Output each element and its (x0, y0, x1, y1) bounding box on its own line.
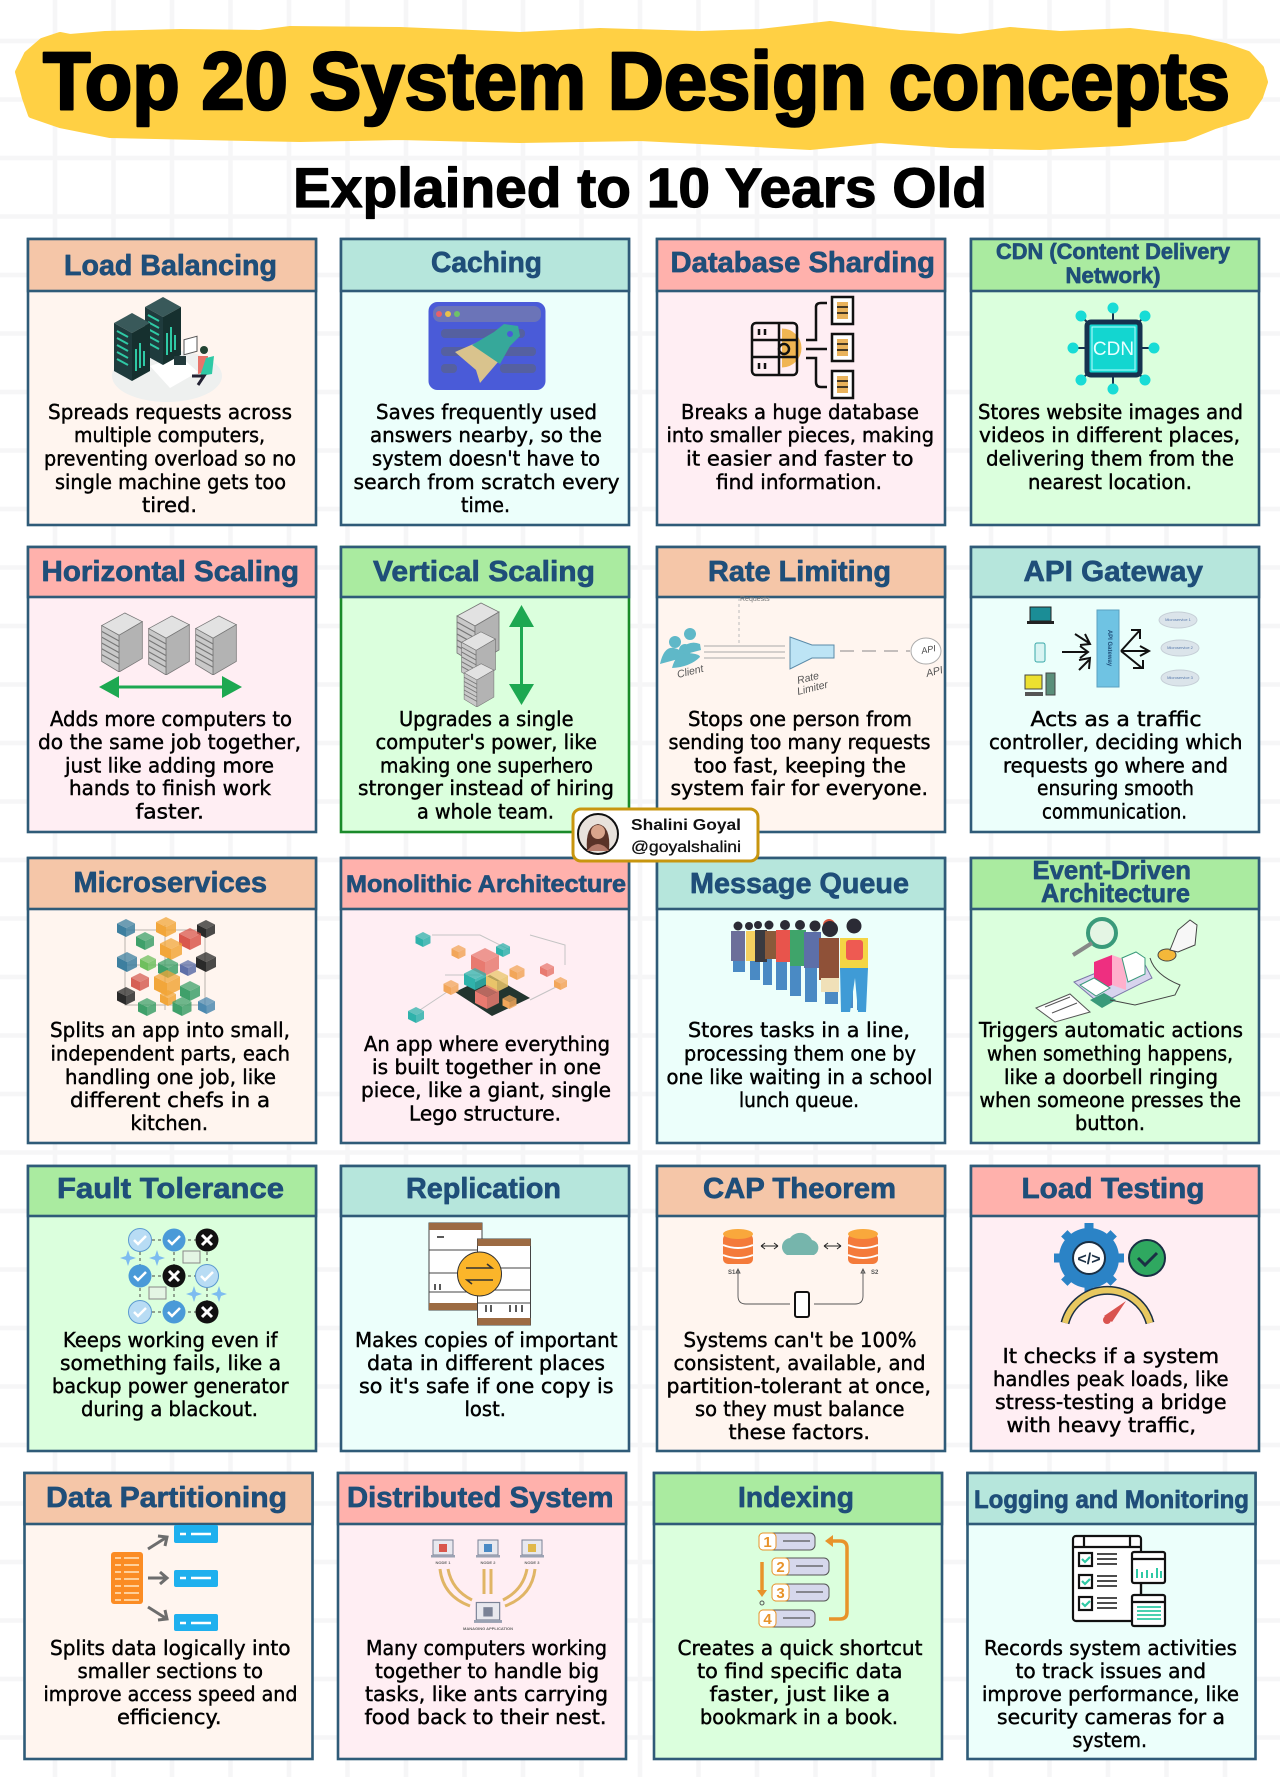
icon: button triggering data blocks (1036, 919, 1197, 1022)
description: into smaller pieces, making (666, 423, 934, 447)
description: improve performance, like (982, 1682, 1239, 1706)
description: Saves frequently used (376, 400, 597, 424)
description (668, 707, 930, 800)
description: one like waiting in a school (666, 1065, 932, 1089)
description: Splits an app into small, (50, 1018, 290, 1042)
description: tasks, like ants carrying (365, 1682, 608, 1706)
panel: Load Testing (971, 1166, 1259, 1451)
heading: Event-Driven Architecture: Architecture (1041, 878, 1190, 908)
description (666, 1018, 932, 1112)
description (666, 400, 934, 494)
icon: stacked servers and vertical arrow (457, 603, 534, 707)
icon: rate limiter diagram: API (924, 664, 944, 680)
icon: API gateway diagram: Microservice 2 (1167, 645, 1194, 650)
description: Lego structure. (409, 1102, 561, 1126)
description: time. (461, 493, 510, 517)
description: with heavy traffic, (1006, 1413, 1196, 1437)
description (361, 1032, 611, 1126)
description (678, 1636, 922, 1729)
description (982, 1636, 1239, 1752)
title banner: Top 20 System Design concepts (43, 36, 1230, 127)
description: find information. (716, 470, 882, 494)
description: Stops one person from (688, 707, 912, 731)
heading: Distributed System: Distributed System (347, 1482, 614, 1514)
description: a whole team. (417, 800, 554, 824)
icon: rate limiter diagram: Requests (740, 596, 770, 603)
heading: Replication: Replication (406, 1173, 561, 1205)
icon: nodes connected to manager: MANAGING APPLICATION (463, 1626, 513, 1631)
description: do the same job together, (38, 730, 301, 754)
description: is built together in one (372, 1055, 601, 1079)
description: stronger instead of hiring (358, 776, 614, 800)
panel: Load Balancing (28, 239, 316, 525)
description: lunch queue. (739, 1088, 859, 1112)
description (666, 1328, 931, 1444)
description: requests go where and (1003, 754, 1228, 778)
heading: Rate Limiting: Rate Limiting (708, 556, 891, 588)
panel: Rate Limiting (657, 547, 945, 832)
heading: Message Queue: Message Queue (690, 868, 909, 900)
description: answers nearby, so the (370, 423, 602, 447)
description: Records system activities (984, 1636, 1237, 1660)
description: faster. (136, 800, 204, 824)
icon: numbered index list with arrows (757, 1533, 847, 1628)
panel: Event-Driven Architecture (971, 855, 1259, 1143)
heading: Data Partitioning: Data Partitioning (46, 1482, 287, 1514)
description: backup power generator (52, 1374, 289, 1398)
heading: Horizontal Scaling: Horizontal Scaling (42, 556, 299, 588)
description: when someone presses the (980, 1088, 1241, 1112)
subtitle: Explained to 10 Years Old (293, 156, 987, 219)
description (978, 1018, 1243, 1135)
heading: API Gateway (971, 547, 1259, 597)
icon: numbered index list with arrows: 1 (763, 1534, 772, 1551)
heading: Replication (341, 1166, 629, 1216)
icon: rate limiter diagram (660, 596, 944, 698)
description: nearest location. (1028, 470, 1192, 494)
heading: CDN (Content Delivery Network): CDN (Content Delivery (996, 239, 1231, 264)
heading: Microservices (28, 858, 316, 909)
description: Breaks a huge database (681, 400, 919, 424)
description: food back to their nest. (364, 1705, 606, 1729)
heading: Load Balancing: Load Balancing (64, 250, 277, 282)
author badge: Shalini Goyal (631, 817, 741, 834)
panel: API Gateway (971, 547, 1259, 832)
heading: Rate Limiting (657, 547, 945, 597)
icon: numbered index list with arrows: 2 (776, 1559, 785, 1576)
icon: nodes connected to manager: NODE 1 (436, 1560, 451, 1565)
heading: Monolithic Architecture (341, 858, 629, 909)
description: faster, just like a (710, 1682, 890, 1706)
description: together to handle big (375, 1659, 599, 1683)
description: preventing overload so no (44, 446, 296, 470)
description: stress-testing a bridge (995, 1390, 1226, 1414)
description: these factors. (728, 1420, 870, 1444)
icon: CAP diagram with two databases (723, 1229, 879, 1317)
description: Keeps working even if (63, 1328, 278, 1352)
description: Many computers working (366, 1636, 607, 1660)
icon: logs dashboard (1073, 1536, 1165, 1626)
description: to track issues and (1016, 1659, 1206, 1683)
description: making one superhero (380, 754, 593, 778)
heading: Caching (341, 239, 629, 291)
description: Splits data logically into (50, 1636, 290, 1660)
panel: CDN (971, 239, 1259, 525)
icon: nodes connected to manager (431, 1540, 544, 1631)
panel: CAP Theorem (657, 1166, 945, 1451)
description: processing them one by (684, 1042, 916, 1066)
description: multiple computers, (74, 423, 265, 447)
panel: Vertical Scaling (341, 547, 629, 832)
description: controller, deciding which (989, 730, 1242, 754)
description: Spreads requests across (48, 400, 292, 424)
icon: browser window and brush (428, 302, 546, 390)
author badge: @goyalshalini (631, 839, 741, 856)
heading: Load Balancing (28, 239, 316, 291)
description: hands to finish work (69, 776, 271, 800)
panel: Caching (341, 239, 629, 525)
icon: rate limiter diagram: Client (676, 663, 706, 681)
icon: gear, check and speed gauge: </> (1077, 1251, 1101, 1268)
description (993, 1344, 1228, 1437)
icon: rate limiter diagram: Rate (796, 670, 820, 687)
heading: Distributed System (338, 1473, 626, 1524)
heading: Horizontal Scaling (28, 547, 316, 597)
description: ensuring smooth (1037, 776, 1194, 800)
description: it easier and faster to (686, 446, 914, 470)
icon: numbered index list with arrows: 4 (763, 1611, 772, 1628)
panel: Database Sharding (657, 239, 945, 525)
description: handling one job, like (65, 1065, 276, 1089)
description: Acts as a traffic (1030, 707, 1202, 731)
icon: two servers with swap badge (429, 1223, 530, 1325)
heading: Event-Driven Architecture: Event-Driven (1032, 855, 1191, 885)
author badge (573, 809, 758, 861)
heading: Database Sharding (657, 239, 945, 291)
icon: server racks with operator (112, 297, 222, 402)
description: partition-tolerant at once, (666, 1374, 931, 1398)
icon: lego block monolith (408, 932, 567, 1023)
description: button. (1075, 1111, 1145, 1135)
heading: Data Partitioning (24, 1473, 312, 1524)
heading: Load Testing: Load Testing (1022, 1173, 1204, 1205)
description: too fast, keeping the (694, 754, 906, 778)
description (52, 1328, 289, 1421)
description: just like adding more (64, 754, 274, 778)
description: independent parts, each (50, 1042, 290, 1066)
description: consistent, available, and (674, 1351, 926, 1375)
icon: nodes connected to manager: NODE 2 (481, 1560, 496, 1565)
description: handles peak loads, like (993, 1367, 1228, 1391)
panel: Logging and Monitoring (968, 1473, 1256, 1759)
heading: Monolithic Architecture: Monolithic Architecture (346, 871, 626, 898)
panel: Microservices (28, 858, 316, 1143)
icon: CAP diagram with two databases: S1 (728, 1270, 736, 1276)
description: sending too many requests (668, 730, 930, 754)
description (364, 1636, 608, 1729)
description: Triggers automatic actions (978, 1018, 1243, 1042)
description: something fails, like a (60, 1351, 281, 1375)
description: like a doorbell ringing (1004, 1065, 1218, 1089)
icon: gear, check and speed gauge (1054, 1223, 1165, 1324)
panel: Distributed System (338, 1473, 626, 1759)
heading: CAP Theorem: CAP Theorem (703, 1173, 896, 1205)
heading: Vertical Scaling: Vertical Scaling (373, 556, 595, 588)
description (38, 707, 301, 824)
description: data in different places (367, 1351, 605, 1375)
description: Adds more computers to (50, 707, 292, 731)
description: system doesn't have to (372, 446, 600, 470)
icon: API gateway diagram (1025, 607, 1199, 696)
heading: Indexing: Indexing (738, 1482, 854, 1514)
heading: Caching: Caching (431, 247, 542, 279)
description (978, 400, 1243, 494)
icon: CDN chip with nodes: CDN (1093, 339, 1134, 360)
description: bookmark in a book. (700, 1705, 898, 1729)
description (50, 1018, 290, 1135)
description: smaller sections to (78, 1659, 263, 1683)
icon: database split into shards (752, 297, 853, 398)
description: search from scratch every (354, 470, 620, 494)
description: efficiency. (117, 1705, 222, 1729)
icon: API gateway diagram: Microservice 1 (1165, 617, 1192, 622)
description: lost. (464, 1397, 506, 1421)
icon: API gateway diagram: Microservice 3 (1167, 675, 1194, 680)
description (358, 707, 614, 824)
description: to find specific data (697, 1659, 902, 1683)
heading: Indexing (654, 1473, 942, 1524)
icon: rate limiter diagram: API (919, 643, 937, 656)
icon: nodes connected to manager: NODE 3 (525, 1560, 540, 1565)
description (44, 400, 296, 517)
icon: CDN chip with nodes (1068, 302, 1160, 394)
description: An app where everything (364, 1032, 610, 1056)
heading: CAP Theorem (657, 1166, 945, 1216)
icon: numbered index list with arrows: 3 (776, 1585, 785, 1602)
description (355, 1328, 618, 1421)
panel: Horizontal Scaling (28, 547, 316, 832)
description: Makes copies of important (355, 1328, 618, 1352)
icon: grid of connected service cubes (117, 917, 216, 1016)
description (44, 1636, 298, 1729)
panel: Indexing (654, 1473, 942, 1759)
heading: Logging and Monitoring: Logging and Monitoring (974, 1486, 1249, 1514)
heading: CDN (Content Delivery Network): Network) (1066, 263, 1160, 288)
description: It checks if a system (1002, 1344, 1219, 1368)
description: single machine gets too (55, 470, 286, 494)
description: Stores tasks in a line, (688, 1018, 910, 1042)
description: during a blackout. (81, 1397, 258, 1421)
panel: Monolithic Architecture (341, 858, 629, 1143)
description: piece, like a giant, single (361, 1078, 611, 1102)
heading: CDN (Content Delivery Network) (971, 239, 1259, 291)
heading: API Gateway: API Gateway (1024, 556, 1203, 588)
icon: rate limiter diagram: Limiter (796, 679, 830, 698)
heading: Load Testing (971, 1166, 1259, 1216)
description: so they must balance (695, 1397, 904, 1421)
heading: Fault Tolerance: Fault Tolerance (57, 1173, 284, 1205)
heading: Fault Tolerance (28, 1166, 316, 1216)
description: improve access speed and (44, 1682, 298, 1706)
heading: Event-Driven Architecture (971, 855, 1259, 909)
panel: Fault Tolerance (28, 1166, 316, 1451)
description: Creates a quick shortcut (678, 1636, 922, 1660)
description: when something happens, (987, 1042, 1233, 1066)
heading: Logging and Monitoring (968, 1473, 1256, 1524)
description: Upgrades a single (399, 707, 574, 731)
heading: Microservices: Microservices (74, 867, 267, 899)
heading: Message Queue (657, 858, 945, 909)
description: videos in different places, (979, 423, 1240, 447)
icon: table split into three blocks (111, 1525, 218, 1631)
panel: Replication (341, 1166, 629, 1451)
panel: Data Partitioning (24, 1473, 312, 1759)
icon: people waiting in line (731, 918, 868, 1012)
heading: Database Sharding: Database Sharding (670, 247, 935, 279)
description: system. (1072, 1728, 1147, 1752)
icon: three servers and horizontal arrow (99, 613, 242, 698)
description (354, 400, 620, 517)
description: system fair for everyone. (670, 776, 928, 800)
icon: CAP diagram with two databases: S2 (871, 1270, 879, 1276)
description: communication. (1042, 800, 1187, 824)
description: so it's safe if one copy is (359, 1374, 614, 1398)
icon: API gateway diagram: API Gateway (1106, 630, 1112, 667)
description: delivering them from the (986, 446, 1234, 470)
description: Stores website images and (978, 400, 1243, 424)
icon: node grid with checks and crosses (120, 1228, 227, 1324)
heading: Vertical Scaling (341, 547, 629, 597)
description: tired. (142, 493, 197, 517)
description (989, 707, 1242, 824)
description: Systems can't be 100% (684, 1328, 916, 1352)
description: computer's power, like (376, 730, 597, 754)
description: kitchen. (130, 1111, 208, 1135)
panel: Message Queue (657, 858, 945, 1143)
description: different chefs in a (70, 1088, 270, 1112)
description: security cameras for a (997, 1705, 1225, 1729)
